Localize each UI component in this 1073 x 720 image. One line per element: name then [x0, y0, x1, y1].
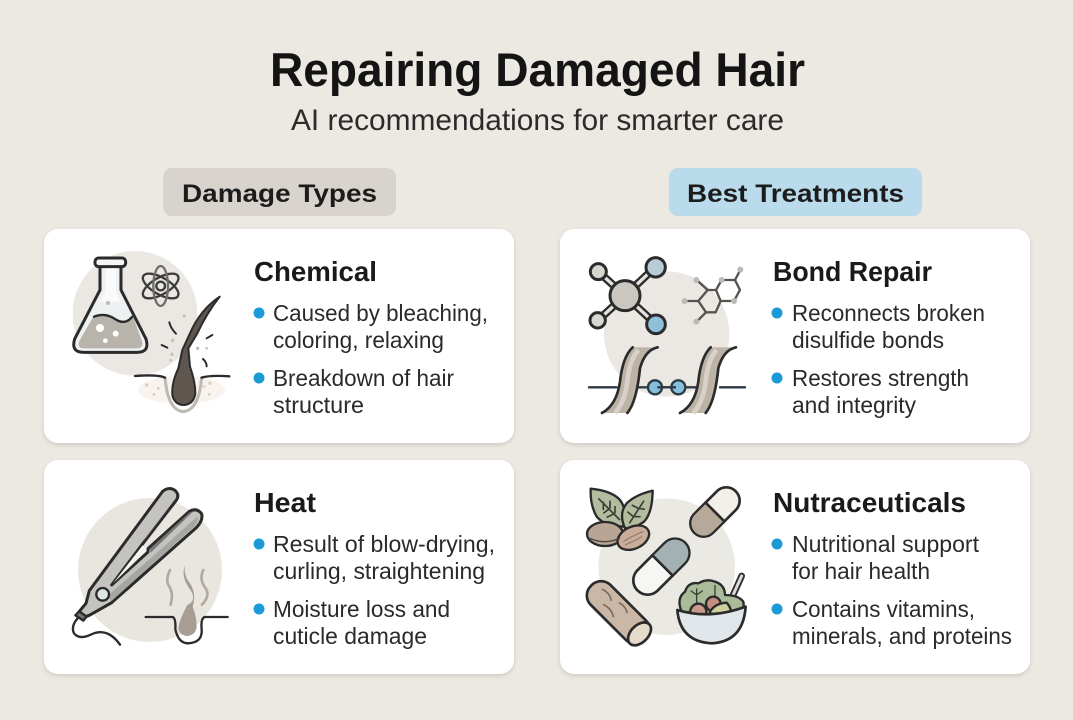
bullet list: bond repair: Restores strength	[792, 365, 969, 391]
bullet list: heat: Result of blow-drying,	[273, 531, 495, 557]
icon: hair straightener and steaming follicle	[73, 488, 228, 645]
icon: molecules and reconnected hair bonds	[589, 258, 745, 413]
title: Repairing Damaged Hair	[270, 43, 805, 96]
capsule: grey-blue and white	[627, 533, 695, 601]
capsule: tan and cream	[685, 482, 745, 542]
bullet list: heat: curling, straightening	[273, 558, 485, 584]
bullet list: bond repair: and integrity	[792, 392, 916, 418]
panel: nutraceuticals	[560, 460, 1030, 674]
bullet list: nutraceuticals: minerals, and proteins	[792, 623, 1012, 649]
leaves and almonds	[587, 489, 653, 555]
heading: bond repair: Bond Repair	[773, 256, 932, 287]
icon: flask, atom and damaged hair	[73, 251, 229, 412]
subtitle: AI recommendations for smarter care	[291, 104, 784, 137]
heading: damage types: Damage Types	[182, 180, 377, 208]
bullet list: nutraceuticals: for hair health	[792, 558, 930, 584]
heading: best treatments	[669, 168, 922, 216]
bullet list: heat: Moisture loss and	[273, 596, 450, 622]
heading: nutraceuticals: Nutraceuticals	[773, 487, 966, 518]
bullet list: chemical: Breakdown of hair	[273, 365, 454, 391]
bullet list: nutraceuticals: Nutritional support	[792, 531, 980, 557]
bullet list: nutraceuticals	[772, 531, 1012, 649]
bullet list: bond repair: Reconnects broken	[792, 300, 985, 326]
panel: heat	[44, 460, 514, 674]
heading: heat: Heat	[254, 487, 316, 518]
salad bowl	[677, 576, 746, 643]
bullet list: heat	[254, 531, 495, 649]
bullet list: chemical: Caused by bleaching,	[273, 300, 488, 326]
bullet list: bond repair	[772, 300, 985, 418]
panel: chemical	[44, 229, 514, 443]
bullet list: chemical: coloring, relaxing	[273, 327, 444, 353]
root log	[581, 576, 656, 650]
bullet list: bond repair: disulfide bonds	[792, 327, 944, 353]
heading: damage types	[163, 168, 396, 216]
panel: bond repair	[560, 229, 1030, 443]
bullet list: chemical: structure	[273, 392, 364, 418]
bullet list: nutraceuticals: Contains vitamins,	[792, 596, 975, 622]
icon: nuts, capsules, root and salad bowl	[581, 482, 746, 650]
heading: chemical: Chemical	[254, 256, 377, 287]
bullet list: heat: cuticle damage	[273, 623, 427, 649]
heading: best treatments: Best Treatments	[687, 180, 904, 208]
bullet list: chemical	[254, 300, 488, 418]
